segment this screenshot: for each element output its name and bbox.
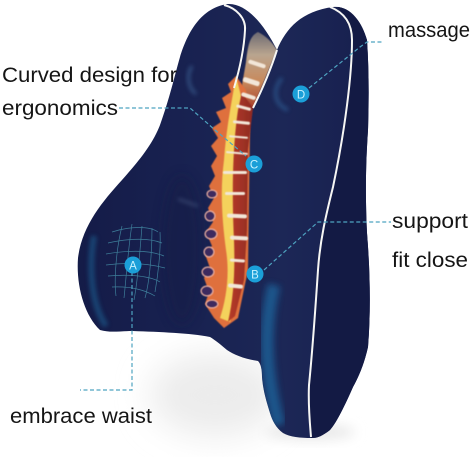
fabric highlight: middle streak — [178, 199, 198, 206]
flames — [204, 76, 250, 328]
marker B — [246, 266, 264, 282]
callout line: massage — [309, 42, 383, 88]
label: embrace waist: embrace waist — [10, 404, 152, 428]
fabric highlight: left wing — [91, 236, 106, 326]
nerve outlines — [201, 190, 218, 308]
callout line: support fit close — [264, 222, 391, 270]
side panel beyond piping — [310, 6, 370, 438]
spine illustration — [201, 32, 277, 328]
marker D — [292, 86, 310, 102]
floor shadow — [150, 353, 355, 440]
marker B: B — [251, 270, 259, 282]
marker C — [246, 156, 262, 172]
cushion body — [70, 0, 380, 445]
vertebra discs — [223, 59, 266, 289]
piping: left lobe — [224, 5, 245, 88]
upper bones — [238, 32, 277, 108]
label: curved design: Curved design for — [2, 63, 177, 87]
piping: right lobe — [309, 7, 352, 437]
callout line: curved design — [119, 108, 246, 156]
mesh grid — [106, 224, 165, 300]
yellow cord — [220, 76, 242, 322]
label: support: support — [392, 209, 468, 233]
label: massage: massage — [388, 18, 470, 42]
marker A — [124, 256, 142, 274]
callout line: embrace waist — [80, 272, 132, 390]
fabric highlight: right lobe — [276, 78, 288, 110]
piping: centre V — [253, 50, 277, 108]
label: fit close: fit close — [392, 248, 468, 272]
dark hollow beside spine — [162, 175, 202, 325]
marker D: D — [297, 90, 305, 102]
fabric highlight: lower right — [267, 285, 279, 425]
marker A: A — [129, 260, 137, 272]
vertebral bodies — [228, 92, 253, 322]
marker C: C — [250, 160, 258, 172]
fabric highlight: left lobe — [189, 66, 196, 94]
label: ergonomics: ergonomics — [2, 96, 118, 120]
